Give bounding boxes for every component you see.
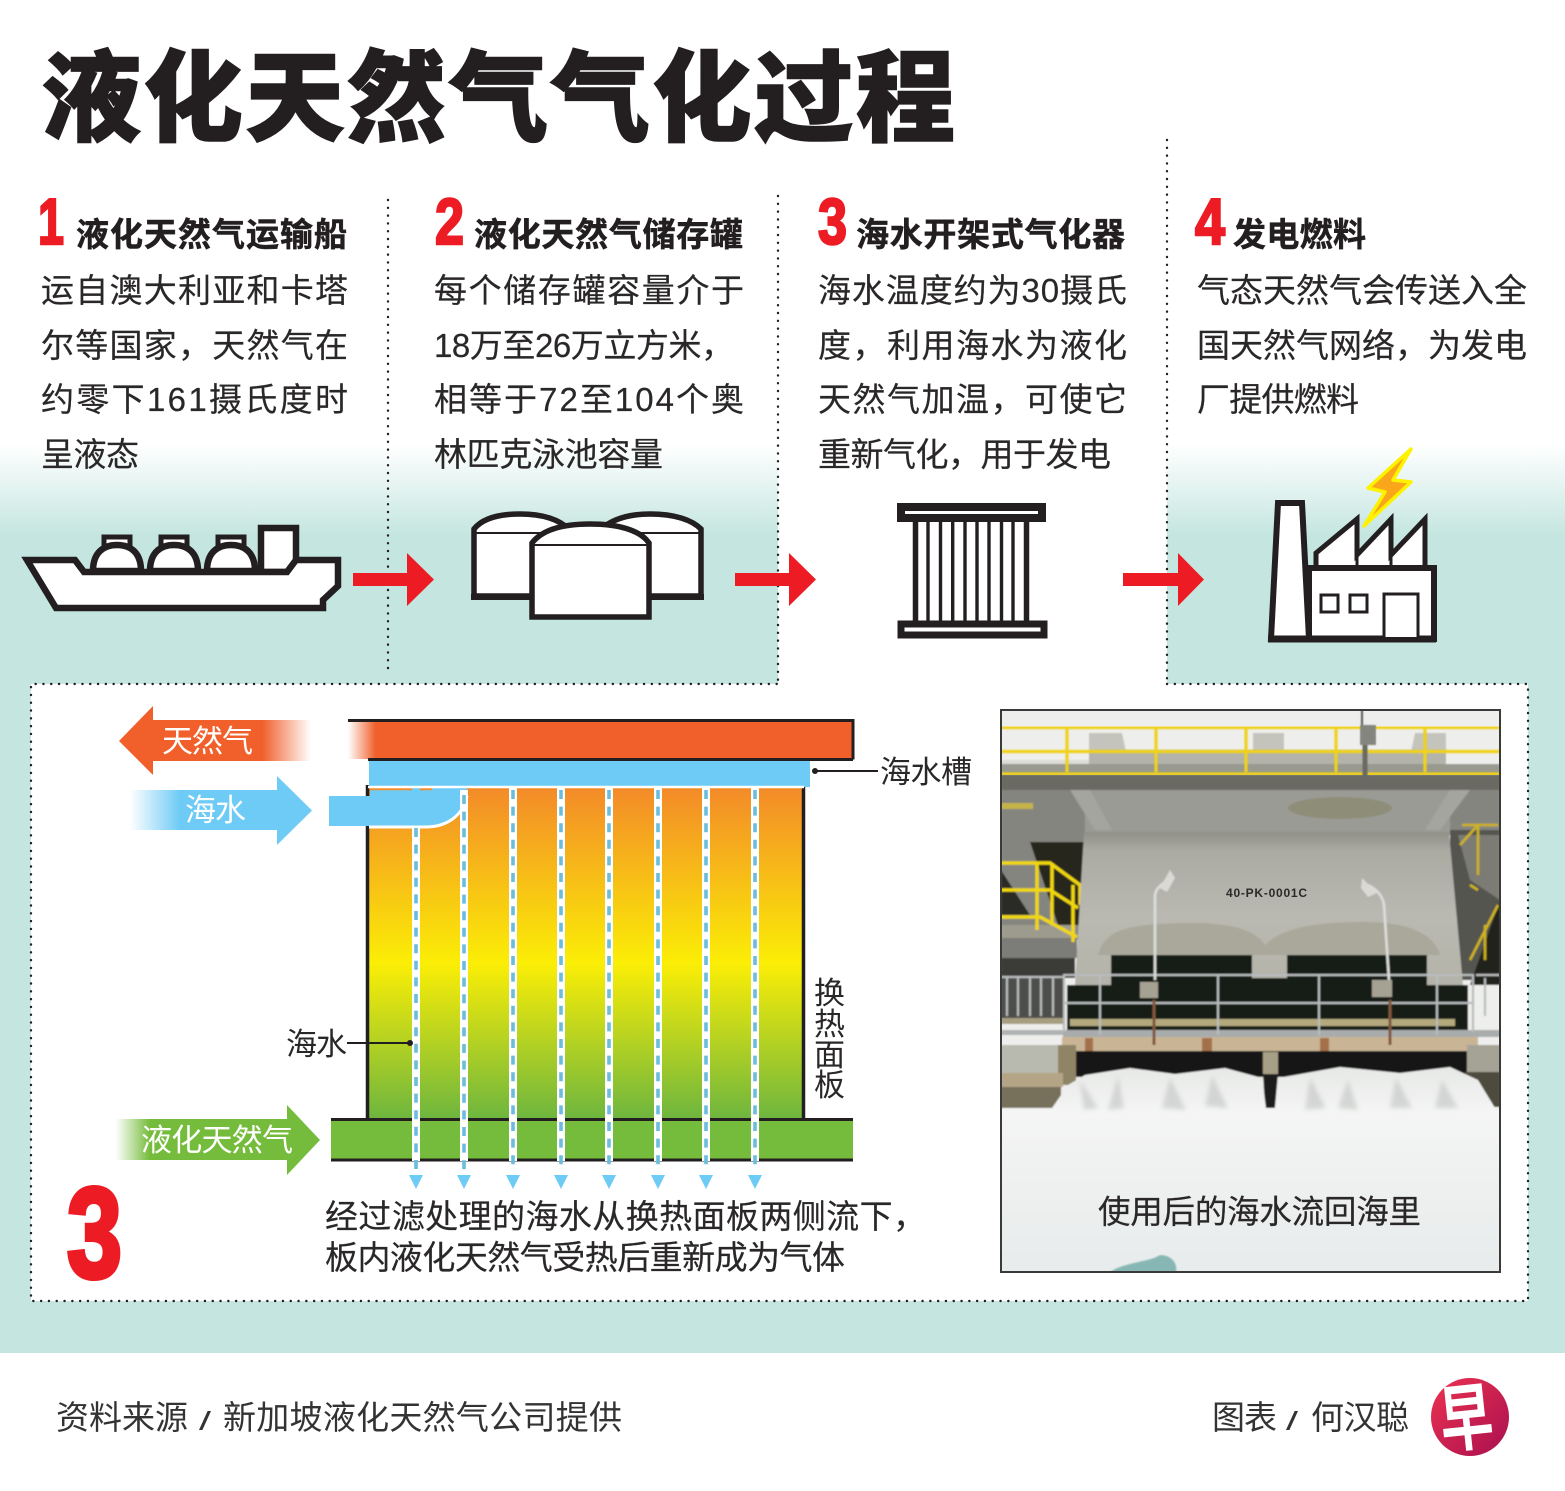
arrow: seawater in xyxy=(130,776,312,845)
LNG header xyxy=(331,1119,853,1160)
foam streaks xyxy=(1080,1076,1458,1110)
step 2 body text: 林匹克泳池容量 xyxy=(434,436,663,473)
author credit xyxy=(1212,1399,1409,1436)
step 1 number: 1 xyxy=(38,185,64,258)
source credit: 新加坡液化天然气公司提供 xyxy=(223,1399,622,1436)
step 4 body text: 气态天然气会传送入全 xyxy=(1197,272,1527,309)
arrow: natural gas out: 天然气 xyxy=(162,724,253,759)
icon: vaporizer panel xyxy=(901,507,1044,635)
seawater slots xyxy=(416,787,755,1170)
arrow: ship to tanks xyxy=(353,553,434,606)
step 1 body text: 运自澳大利亚和卡塔 xyxy=(41,272,348,309)
step 2 heading: 液化天然气储存罐 xyxy=(474,216,743,253)
diagram caption: 经过滤处理的海水从换热面板两侧流下， xyxy=(325,1198,926,1235)
arrow: LNG in: 液化天然气 xyxy=(141,1123,293,1158)
label: seawater: 海水 xyxy=(286,1027,347,1062)
title: 液化天然气气化过程 xyxy=(42,43,955,154)
step 1 heading: 液化天然气运输船 xyxy=(76,216,347,253)
top yellow rails xyxy=(1001,728,1500,774)
step 1 body text: 呈液态 xyxy=(41,436,139,473)
icon: factory with lightning xyxy=(1268,449,1436,639)
panel: step 3 open rack vaporizer xyxy=(818,185,1127,635)
step 2 body text: 相等于72至104个奥 xyxy=(434,381,744,418)
step 3 number: 3 xyxy=(818,185,847,258)
step 1 body text xyxy=(41,272,348,473)
step 4 body text: 国天然气网络，为发电 xyxy=(1197,327,1527,364)
label: heat exchange panel xyxy=(814,976,845,1103)
source credit: 资料来源 xyxy=(56,1399,188,1436)
arrow: LNG in xyxy=(116,1105,320,1175)
label: seawater trough: 海水槽 xyxy=(880,755,972,790)
stenciled tag: 40-PK-0001C xyxy=(1226,886,1307,900)
label: seawater xyxy=(286,1027,413,1062)
step 3 body text: 天然气加温，可使它 xyxy=(818,381,1127,418)
step 4 heading: 发电燃料 xyxy=(1233,216,1366,253)
heat exchange panel xyxy=(368,785,804,1120)
icon: storage tanks xyxy=(471,514,704,617)
step 4 body text xyxy=(1197,272,1527,418)
arrow: seawater in: 海水 xyxy=(185,793,246,828)
step 1 body text: 约零下161摄氏度时 xyxy=(41,381,348,418)
label: heat exchange panel: 板 xyxy=(814,1068,845,1103)
seawater inlet pipe xyxy=(329,787,467,826)
arrow: vaporizer to power plant xyxy=(1123,553,1204,606)
step 2 body text: 18万至26万立方米， xyxy=(434,327,734,364)
author credit: 图表 xyxy=(1212,1399,1277,1436)
natural gas header xyxy=(348,720,853,760)
source credit: / xyxy=(199,1406,212,1436)
downward flow arrowheads xyxy=(409,1175,762,1189)
panel: step 2 storage tanks xyxy=(434,185,744,617)
panel: photo of seawater outfall xyxy=(1001,710,1500,1272)
step 3 body text xyxy=(818,272,1127,473)
seawater trough xyxy=(369,760,810,787)
panel: step 1 LNG carrier xyxy=(27,185,348,608)
label: heat exchange panel: 热 xyxy=(814,1007,845,1042)
label: seawater trough xyxy=(812,755,972,790)
diagram caption: 板内液化天然气受热后重新成为气体 xyxy=(325,1239,845,1276)
icon: LNG ship xyxy=(27,528,338,608)
junction box xyxy=(1360,710,1376,780)
step 2 number: 2 xyxy=(435,185,464,258)
step 4 number: 4 xyxy=(1195,185,1225,258)
step 3 body text: 重新气化，用于发电 xyxy=(818,436,1111,473)
photo caption: 使用后的海水流回海里 xyxy=(1098,1194,1421,1230)
label: heat exchange panel: 面 xyxy=(814,1038,845,1073)
step 2 body text: 每个储存罐容量介于 xyxy=(434,272,744,309)
panel: step 4 power generation fuel xyxy=(1195,185,1527,639)
step 3 body text: 海水温度约为30摄氏 xyxy=(818,272,1127,309)
arrow: tanks to vaporizer xyxy=(735,553,816,606)
panel: vaporizer diagram xyxy=(67,706,972,1305)
author credit: 何汉聪 xyxy=(1311,1399,1409,1436)
author credit: / xyxy=(1286,1406,1299,1436)
step 3 body text: 度，利用海水为液化 xyxy=(818,327,1127,364)
step 3 heading: 海水开架式气化器 xyxy=(856,216,1125,253)
step 2 body text xyxy=(434,272,744,473)
step 1 body text: 尔等国家，天然气在 xyxy=(41,327,348,364)
step 4 body text: 厂提供燃料 xyxy=(1197,381,1359,418)
arrow: natural gas out xyxy=(119,706,311,775)
diagram caption xyxy=(325,1198,926,1276)
label: heat exchange panel: 换 xyxy=(814,976,845,1011)
logo: 早 xyxy=(1434,1358,1497,1468)
big number 3: 3 xyxy=(67,1162,122,1305)
seawater patch xyxy=(1110,1255,1176,1272)
